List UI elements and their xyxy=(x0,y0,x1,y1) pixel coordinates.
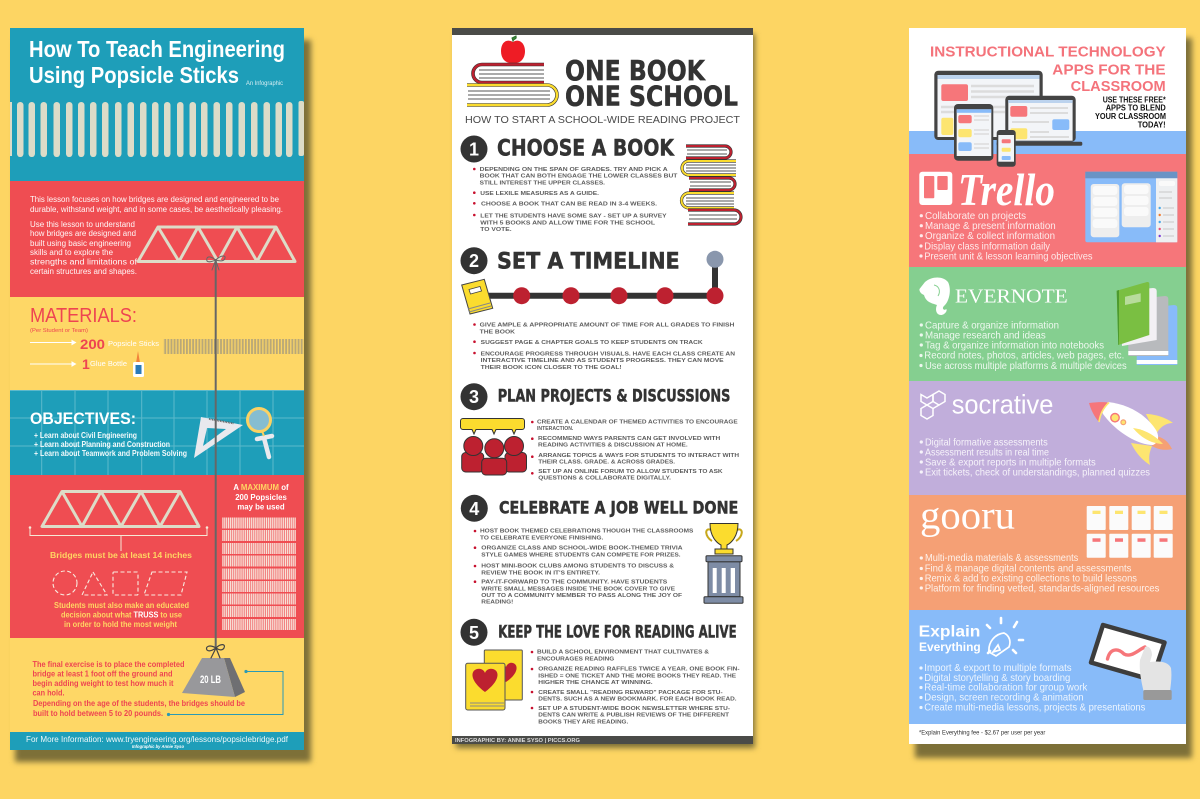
gooru features: Remix & add to existing collections to build lessons xyxy=(925,574,1137,585)
maximum text: 200 Popsicles xyxy=(235,493,287,502)
bullet list: REVIEW THE BOOK IN IT'S ENTIRETY. xyxy=(481,570,600,576)
glue label: Glue Bottle xyxy=(90,359,127,368)
explain everything features: Import & export to multiple formats xyxy=(924,663,1072,674)
length requirement: Bridges must be at least 14 inches xyxy=(50,551,192,560)
credit: Infographic by Annie Syso xyxy=(132,744,184,749)
evernote features: Use across multiple platforms & multiple devices xyxy=(925,361,1127,372)
testing band xyxy=(10,638,304,732)
gooru logo: gooru xyxy=(920,492,1015,537)
testing text: The final exercise is to place the completed xyxy=(32,660,185,669)
intro text: This lesson focuses on how bridges are designed and engineered to be xyxy=(30,195,280,204)
monitor xyxy=(934,71,1043,140)
explain everything features: Real-time collaboration for group work xyxy=(924,683,1088,694)
testing text xyxy=(32,660,245,718)
constraints band xyxy=(10,475,304,638)
subtitle xyxy=(1095,95,1166,129)
title xyxy=(565,54,738,113)
icon: magnifier xyxy=(248,408,272,457)
bullet list: STILL INTEREST THE UPPER CLASSES. xyxy=(480,181,605,187)
explain everything features: Digital storytelling & story boarding xyxy=(924,673,1070,684)
bullet list: ENCOURAGES READING xyxy=(537,656,615,662)
number badge 5: 5 xyxy=(469,623,479,643)
heading: KEEP THE LOVE FOR READING ALIVE xyxy=(498,622,737,642)
explain everything logo: Everything xyxy=(919,642,981,654)
header band xyxy=(10,28,304,181)
number badge 4: 4 xyxy=(469,499,479,519)
bullet list xyxy=(473,167,678,233)
trello features: Manage & present information xyxy=(925,221,1056,232)
subtitle: TODAY! xyxy=(1138,120,1166,129)
bullet list: WRITE SMALL MESSAGES INSIDE THE BOOK COVER TO GIVE xyxy=(481,586,675,592)
number badge 5 xyxy=(460,619,488,646)
bullet list: GIVE AMPLE & APPROPRIATE AMOUNT OF TIME FOR ALL GRADES TO FINISH xyxy=(480,323,734,329)
bullet list xyxy=(531,650,740,726)
bullet list: READING! xyxy=(481,599,513,605)
gooru features xyxy=(920,553,1159,594)
trello logo: Trello xyxy=(958,164,1055,215)
maximum text xyxy=(233,483,289,512)
hanging string with knots xyxy=(206,256,225,658)
trello features: Present unit & lesson learning objectives xyxy=(924,251,1093,262)
icon: glue bottle xyxy=(133,351,144,377)
bullet list: CREATE SMALL "READING REWARD" PACKAGE FOR STU- xyxy=(538,690,723,696)
section 1: choose a book xyxy=(460,136,741,233)
bullet list: ARRANGE TOPICS & WAYS FOR STUDENTS TO INTERACT WITH xyxy=(538,453,739,459)
trello features: Display class information daily xyxy=(924,241,1051,252)
intro band xyxy=(10,181,304,297)
title xyxy=(29,36,285,88)
quantity 1: 1 xyxy=(82,356,90,372)
section 3: plan projects xyxy=(460,383,739,481)
phone xyxy=(997,130,1016,167)
icon: rocket xyxy=(1089,402,1173,465)
subtitle: APPS TO BLEND xyxy=(1106,104,1166,113)
tablet xyxy=(954,104,993,161)
number badge 1: 1 xyxy=(469,140,479,160)
app: trello xyxy=(919,164,1177,262)
evernote features: Tag & organize information into notebooks xyxy=(925,340,1104,351)
gooru features: Find & manage digital contents and assessments xyxy=(925,564,1131,575)
bullet list: LET THE STUDENTS HAVE SOME SAY - SET UP A SURVEY xyxy=(480,213,667,219)
bullet list: INTERACTIVE TIMELINE AND AS STUDENTS PROGRESS. THEY CAN MOVE xyxy=(481,358,724,364)
bullet list: DENTS. SUCH AS A NEW BOOKMARK. FOR EACH BOOK READ. xyxy=(538,697,737,703)
subtitle: YOUR CLASSROOM xyxy=(1095,112,1166,121)
resource cards xyxy=(1087,506,1173,558)
bullet list: ISHED = ONE TICKET AND THE MORE BOOKS THEY READ. THE xyxy=(538,673,736,679)
truss decision text: decision about what TRUSS to use xyxy=(61,610,182,620)
materials band xyxy=(10,297,304,390)
trello logo xyxy=(919,164,1055,215)
socrative features: Save & export reports in multiple formats xyxy=(925,457,1096,468)
bullet list: BOOK THAT CAN BOTH ENGAGE THE LOWER CLASSES BUT xyxy=(480,174,678,180)
explain everything logo xyxy=(919,618,1023,656)
popsicle stick row xyxy=(10,101,304,157)
bullet list: HIGHER THE CHANCE AT WINNING. xyxy=(538,680,653,686)
bullet list xyxy=(473,323,735,371)
footer bar xyxy=(452,736,753,744)
subtitle: HOW TO START A SCHOOL-WIDE READING PROJECT xyxy=(465,115,740,126)
maximum text: may be used xyxy=(237,502,285,512)
quantity 200: 200 xyxy=(80,336,105,352)
laptop xyxy=(997,96,1082,146)
connector xyxy=(167,670,283,716)
title xyxy=(930,45,1166,95)
bullet list: READING ACTIVITIES & DISCUSSION AT HOME. xyxy=(538,442,688,448)
evernote features xyxy=(919,320,1127,372)
objectives list: + Learn about Teamwork and Problem Solving xyxy=(34,449,187,458)
gooru features: Multi-media materials & assessments xyxy=(925,553,1078,564)
intro text: certain structures and shapes. xyxy=(30,267,137,276)
heading: SET A TIMELINE xyxy=(497,249,680,274)
evernote logo: EVERNOTE xyxy=(955,286,1068,308)
bullet list: CHOOSE A BOOK THAT CAN BE READ IN 3-4 WEEKS. xyxy=(481,202,657,208)
title: CLASSROOM xyxy=(1071,79,1166,95)
panel: instructional technology apps infographic xyxy=(909,28,1192,758)
bullet list: THE BOOK xyxy=(480,330,516,336)
trello features xyxy=(919,211,1093,262)
app: socrative xyxy=(920,389,1173,478)
popsicle allowance grid xyxy=(222,518,296,630)
objectives list: + Learn about Civil Engineering xyxy=(34,431,137,440)
icon: hand on tablet xyxy=(1091,625,1172,700)
bullet list: SET UP A STUDENT-WIDE BOOK NEWSLETTER WHERE STU- xyxy=(538,706,730,712)
materials heading: MATERIALS: xyxy=(30,305,137,327)
bullet list: ORGANIZE READING RAFFLES TWICE A YEAR. ONE BOOK FIN- xyxy=(538,666,740,672)
panel: one book one school infographic xyxy=(452,28,755,748)
icon: apple on books xyxy=(467,36,557,105)
intro text: strengths and limitations of xyxy=(30,258,138,266)
section 5: keep the love xyxy=(460,619,740,726)
bullet list: HOST BOOK THEMED CELEBRATIONS THOUGH THE CLASSROOMS xyxy=(480,529,693,535)
measuring bracket xyxy=(29,527,208,551)
testing text: can hold. xyxy=(32,688,64,698)
more info link: For More Information: www.tryengineering.org/lessons/popsiclebridge.pdf xyxy=(26,734,289,744)
truss decision text: in order to hold the most weight xyxy=(64,620,177,629)
explain everything features xyxy=(919,663,1145,714)
subtitle: An Infographic xyxy=(246,81,283,87)
footer bar: INFOGRAPHIC BY: ANNIE SYSO | PICCS.ORG xyxy=(455,738,580,744)
colored bands xyxy=(909,131,1186,724)
heading: CELEBRATE A JOB WELL DONE xyxy=(499,498,738,518)
socrative features: Assessment results in real time xyxy=(925,447,1049,458)
heading: CHOOSE A BOOK xyxy=(497,137,675,162)
icon: 20 lb weight xyxy=(182,658,245,697)
explain everything features: Design, screen recording & animation xyxy=(924,693,1084,704)
objectives list xyxy=(34,431,187,458)
footer band xyxy=(10,732,304,750)
bullet list: SUGGEST PAGE & CHAPTER GOALS TO KEEP STUDENTS ON TRACK xyxy=(481,340,704,346)
number badge 2 xyxy=(460,247,488,274)
heading: PLAN PROJECTS & DISCUSSIONS xyxy=(498,387,730,407)
truss decision text xyxy=(54,601,189,629)
icon: set square xyxy=(194,417,243,458)
bullet list xyxy=(474,529,693,605)
evernote features: Capture & organize information xyxy=(925,320,1059,331)
testing text: bridge at least 1 foot off the ground and xyxy=(32,670,173,678)
bullet list: THEIR CLASS. GRADE. & ACROSS GRADES. xyxy=(538,459,675,465)
intro text: Use this lesson to understand xyxy=(30,220,135,229)
socrative features: Exit tickets, check of understandings, planned quizzes xyxy=(925,467,1150,478)
section 2: set a timeline xyxy=(460,247,735,371)
bridge illustration xyxy=(42,492,199,526)
materials note: (Per Student or Team) xyxy=(30,328,88,334)
socrative logo: socrative xyxy=(952,389,1053,419)
socrative features xyxy=(920,437,1150,478)
icon: trophy on pedestal xyxy=(704,524,743,603)
bullet list: HOST MINI-BOOK CLUBS AMONG STUDENTS TO DISCUSS & xyxy=(481,564,675,570)
bullet list: THEIR BOOK ICON CLOSER TO THE GOAL! xyxy=(481,365,622,371)
bullet list: INTERACTION. xyxy=(537,426,574,432)
dashed truss shapes xyxy=(53,571,187,595)
intro text: skills and to explore the xyxy=(30,248,114,257)
bullet list: TO VOTE. xyxy=(480,227,512,233)
section 4: celebrate xyxy=(461,495,743,605)
bullet list: TO CELEBRATE EVERYONE FINISHING. xyxy=(480,535,604,541)
title: ONE SCHOOL xyxy=(565,80,738,113)
number badge 3 xyxy=(460,383,488,410)
testing text: built to hold between 5 to 20 pounds. xyxy=(33,709,163,718)
bullet list: QUESTIONS & COLLABORATE DIGITALLY. xyxy=(538,475,671,481)
gooru features: Platform for finding vetted, standards-aligned resources xyxy=(925,583,1159,594)
bullet list: CREATE A CALENDAR OF THEMED ACTIVITIES TO ENCOURAGE xyxy=(537,419,738,425)
maximum text: A MAXIMUM of xyxy=(233,483,289,492)
bullet list: DEPENDING ON THE SPAN OF GRADES. TRY AND PICK A xyxy=(480,167,669,173)
icon: heart books xyxy=(466,650,522,710)
title: INSTRUCTIONAL TECHNOLOGY xyxy=(930,45,1166,61)
app: gooru xyxy=(920,492,1173,594)
trello board screenshot xyxy=(1085,172,1177,242)
number badge 1 xyxy=(460,136,488,162)
bullet list xyxy=(531,419,739,481)
arrows xyxy=(30,340,76,366)
evernote features: Record notes, photos, articles, web pages, etc. xyxy=(924,351,1124,362)
intro text: built using basic engineering xyxy=(30,239,131,248)
socrative features: Digital formative assessments xyxy=(925,437,1048,448)
objectives band xyxy=(10,390,304,475)
testing text: begin adding weight to test how much it xyxy=(32,679,174,688)
subtitle: USE THESE FREE* xyxy=(1103,95,1166,104)
number badge 2: 2 xyxy=(469,251,479,271)
objectives heading: OBJECTIVES: xyxy=(30,409,136,428)
app: evernote xyxy=(919,278,1177,372)
number badge 4 xyxy=(461,495,488,522)
title: ONE BOOK xyxy=(565,54,706,87)
stick strip xyxy=(163,339,304,354)
icon: responsive devices xyxy=(934,71,1082,167)
icon: notebooks xyxy=(1117,282,1177,365)
bridge illustration xyxy=(138,227,295,262)
evernote features: Manage research and ideas xyxy=(925,330,1046,341)
trello features: Collaborate on projects xyxy=(925,211,1026,222)
bullet list: DENTS CAN WRITE & PUBLISH REVIEWS OF THE DIFFERENT xyxy=(538,713,729,719)
bullet list: BUILD A SCHOOL ENVIRONMENT THAT CULTIVATES & xyxy=(537,650,710,656)
bullet list: USE LEXILE MEASURES AS A GUIDE. xyxy=(480,191,599,197)
explain everything features: Create multi-media lessons, projects & presentations xyxy=(924,703,1145,714)
bullet list: SET UP AN ONLINE FORUM TO ALLOW STUDENTS TO ASK xyxy=(538,469,723,475)
bullet list: STYLE GAMES WHERE STUDENTS CAN COMPETE FOR PRIZES. xyxy=(481,552,681,558)
trello features: Organize & collect information xyxy=(925,231,1055,242)
number badge 3: 3 xyxy=(469,387,479,407)
icon: yellow book xyxy=(462,279,493,314)
icon: 20 lb weight: 20 LB xyxy=(200,674,221,686)
bullet list: RECOMMEND WAYS PARENTS CAN GET INVOLVED WITH xyxy=(538,436,720,442)
timeline xyxy=(488,251,724,304)
app: explain everything xyxy=(919,618,1172,714)
bullet list: BOOKS THEY ARE READING. xyxy=(538,720,629,726)
icon: book stack xyxy=(682,146,741,224)
bullet list: PAY-IT-FORWARD TO THE COMMUNITY. HAVE STUDENTS xyxy=(481,580,667,586)
evernote logo xyxy=(919,278,1068,315)
truss decision text: Students must also make an educated xyxy=(54,601,189,610)
icon: people with speech bubble xyxy=(460,418,526,475)
testing text: Depending on the age of the students, the bridges should be xyxy=(33,699,245,708)
title: APPS FOR THE xyxy=(1052,62,1166,78)
bullet list: ORGANIZE CLASS AND SCHOOL-WIDE BOOK-THEMED TRIVIA xyxy=(481,545,683,551)
title: Using Popsicle Sticks xyxy=(29,62,239,88)
objectives list: + Learn about Planning and Construction xyxy=(34,440,170,449)
explain everything logo: Explain xyxy=(919,624,980,641)
popsicle sticks label: Popsicle Sticks xyxy=(108,339,159,348)
intro text: how bridges are designed and xyxy=(30,229,136,238)
title: How To Teach Engineering xyxy=(29,36,285,62)
panel: popsicle engineering infographic xyxy=(10,28,311,762)
intro text: durable, withstand weight, and in some cases, be aesthetically pleasing. xyxy=(30,205,283,214)
intro text xyxy=(30,195,283,276)
bullet list: OUT TO A COMMUNITY MEMBER TO PASS ALONG THE JOY OF xyxy=(481,593,682,599)
bullet list: ENCOURAGE PROGRESS THROUGH VISUALS. HAVE EACH CLASS CREATE AN xyxy=(481,351,735,357)
footnote: *Explain Everything fee - $2.67 per user per year xyxy=(919,730,1045,736)
bullet list: WITH 5 BOOKS AND ALLOW TIME FOR THE SCHOOL xyxy=(480,220,655,226)
